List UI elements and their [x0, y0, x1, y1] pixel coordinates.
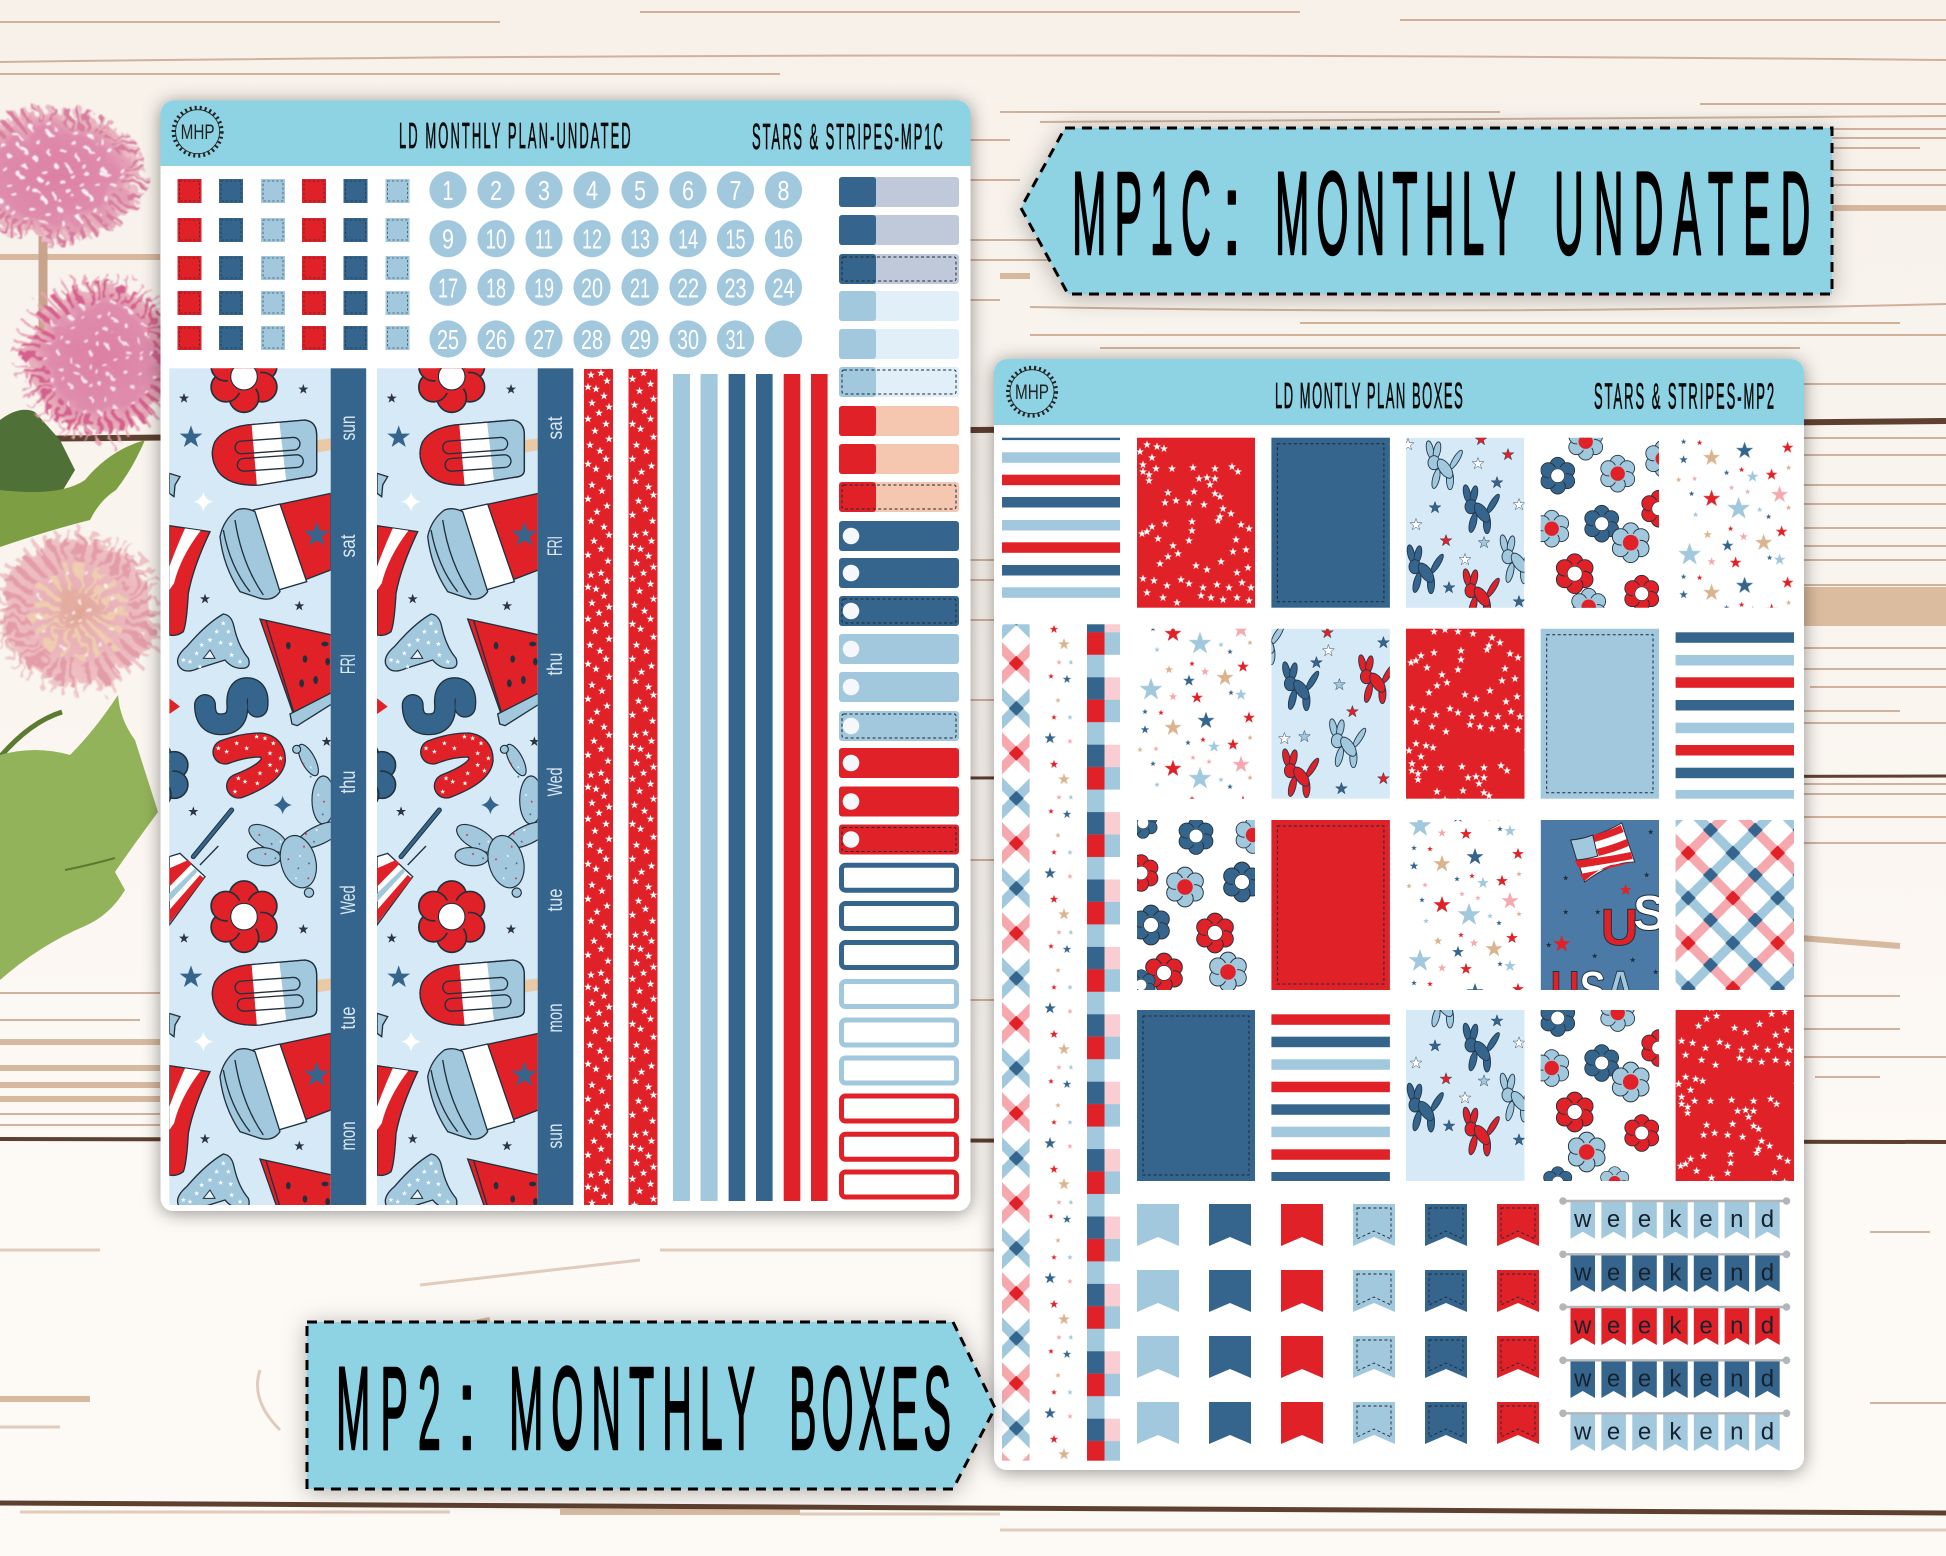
light blue dashed box [1541, 629, 1659, 799]
date number circles 1 to 31: 31 [726, 324, 746, 355]
date number circles 1 to 31: 7 [730, 175, 742, 206]
illustrated washi strip with weekdays, Monday start: thu [544, 652, 567, 676]
stripes box [1271, 1014, 1390, 1181]
icon: MHP wreath logo: MHP [181, 121, 215, 144]
colour block washi strip [1087, 624, 1120, 1461]
date number circles 1 to 31: 22 [677, 272, 699, 303]
red stars box [1406, 629, 1524, 799]
weekend banner stickers: weekend [1573, 1206, 1774, 1233]
red stars box [1676, 1010, 1794, 1181]
navy USA flag box [1540, 820, 1666, 1017]
flowers box [1540, 1010, 1659, 1181]
balloon dog box [1271, 628, 1390, 798]
red dashed box [1271, 820, 1390, 990]
illustrated washi strip with weekdays, Sunday start: thu [337, 770, 360, 794]
callout: MP2 monthly boxes: MP2 [336, 1342, 451, 1474]
date number circles 1 to 31: 20 [581, 272, 603, 303]
red star washi strips [584, 369, 658, 1205]
callout: MP2 monthly boxes: : [457, 1342, 477, 1474]
date number circles 1 to 31: 9 [442, 224, 454, 255]
row 4 full box stickers [1137, 972, 1794, 1197]
icon: upper green leaf [0, 410, 145, 547]
weekend banner stickers: weekend [1573, 1418, 1774, 1446]
panel: MP1C monthly undated sticker sheet [148, 90, 983, 1226]
date number circles 1 to 31: 11 [535, 224, 553, 255]
sheet header band [160, 100, 970, 166]
weekend banner stickers [1560, 1198, 1789, 1451]
date number circles 1 to 31: 26 [485, 324, 507, 355]
solid label stickers with white dots [839, 521, 959, 854]
navy dashed box [1137, 1010, 1255, 1181]
multicolour stars box [1406, 820, 1524, 990]
illustrated washi strip with weekdays, Monday start: mon [544, 1004, 567, 1032]
scattered star washi strip [1045, 624, 1073, 1461]
decorative flowers and leaves [0, 113, 178, 980]
small square stickers [178, 179, 410, 350]
sheet code: STARS & STRIPES-MP2 [1594, 377, 1776, 416]
callout: MP2 monthly boxes [307, 1322, 995, 1489]
balloon dog box [1406, 1010, 1524, 1181]
callout: MP2 monthly boxes: MONTHLY [509, 1342, 763, 1474]
callout: MP2 monthly boxes: BOXES [789, 1342, 956, 1474]
date number circles 1 to 31: 21 [630, 272, 650, 303]
date number circles 1 to 31: 28 [581, 324, 603, 355]
icon: pink flower top [0, 113, 139, 237]
date number circles 1 to 31: 6 [682, 175, 694, 206]
row 2 full box stickers [1137, 615, 1794, 799]
flag tab stickers [1137, 1204, 1539, 1444]
row 1 full box stickers [1002, 423, 1794, 648]
navy USA flag box: U [1601, 899, 1638, 957]
illustrated washi strip with weekdays, Monday start: Wed [544, 768, 567, 796]
sheet header band [994, 359, 1804, 425]
icon: MHP wreath logo: MHP [1015, 381, 1049, 404]
illustrated washi strip with weekdays, Monday start: tue [544, 888, 567, 912]
date number circles 1 to 31: 1 [442, 175, 454, 206]
date number circles 1 to 31 [429, 171, 802, 358]
illustrated washi strip with weekdays, Sunday start: sun [337, 416, 360, 440]
illustrated washi strip with weekdays, Sunday start [169, 368, 366, 1205]
illustrated washi strip with weekdays, Monday start: FRI [544, 536, 567, 556]
icon: lower green leaf [0, 695, 158, 980]
stripes box [1676, 632, 1794, 799]
date number circles 1 to 31: 5 [634, 175, 646, 206]
red stars box [1137, 438, 1255, 608]
date number circles 1 to 31: 30 [677, 324, 699, 355]
date number circles 1 to 31: 2 [490, 175, 502, 206]
stripes box [1002, 438, 1120, 598]
icon: pale pink flower lower [0, 535, 159, 689]
date number circles 1 to 31: 4 [586, 175, 598, 206]
date number circles 1 to 31: 16 [774, 224, 794, 255]
icon: pink flower middle [22, 280, 178, 436]
navy USA flag box: S [1633, 885, 1666, 941]
navy USA flag box: USA [1551, 961, 1635, 1017]
date number circles 1 to 31: 19 [534, 272, 554, 303]
date number circles 1 to 31: 25 [437, 324, 459, 355]
icon: flower stem [38, 236, 48, 330]
date number circles 1 to 31: 29 [629, 324, 651, 355]
date number circles 1 to 31: 27 [533, 324, 555, 355]
weekend banner stickers: weekend [1573, 1260, 1774, 1286]
navy dashed box [1271, 438, 1390, 608]
date number circles 1 to 31: 18 [486, 272, 506, 303]
illustrated washi strip with weekdays, Sunday start: mon [337, 1122, 360, 1150]
icon: MHP wreath logo [174, 108, 222, 156]
sheet title: LD MONTHLY PLAN-UNDATED [399, 116, 633, 156]
callout: MP1C monthly undated [1021, 128, 1832, 294]
outlined label stickers [842, 865, 956, 1197]
sheet title: LD MONTLY PLAN BOXES [1275, 376, 1464, 416]
date number circles 1 to 31: 15 [726, 224, 746, 255]
callout: MP1C monthly undated: MONTHLY [1275, 147, 1523, 279]
callout: MP1C monthly undated: UNDATED [1554, 147, 1820, 279]
date number circles 1 to 31: 14 [678, 224, 698, 255]
illustrated washi strip with weekdays, Monday start [377, 368, 574, 1205]
illustrated washi strip with weekdays, Sunday start: tue [337, 1006, 360, 1030]
balloon dog box [1406, 438, 1524, 608]
two-tone header label stickers [839, 177, 959, 512]
weekend banner stickers: weekend [1573, 1366, 1774, 1392]
illustrated washi strip with weekdays, Monday start: sun [544, 1124, 567, 1148]
flowers box [1137, 820, 1255, 990]
weekend banner stickers: weekend [1573, 1312, 1774, 1340]
flowers box [1540, 438, 1659, 608]
row 3 full box stickers [1124, 808, 1794, 1017]
icon: MHP wreath logo [1008, 368, 1056, 416]
date number circles 1 to 31: 10 [486, 224, 506, 255]
plaid box [1676, 820, 1794, 990]
date number circles 1 to 31: 23 [724, 272, 746, 303]
sheet code: STARS & STRIPES-MP1C [752, 117, 945, 157]
callout: MP1C monthly undated: MP1C [1072, 147, 1219, 279]
date number circles 1 to 31: 24 [772, 272, 794, 303]
multicolour stars box [1676, 438, 1794, 608]
date number circles 1 to 31: 12 [582, 224, 602, 255]
date number circles 1 to 31: 8 [778, 175, 790, 206]
multicolour stars box [1137, 629, 1255, 799]
illustrated washi strip with weekdays, Sunday start: FRI [337, 654, 360, 674]
vertical colour stripes [673, 374, 828, 1201]
date number circles 1 to 31: 3 [538, 175, 550, 206]
callout: MP1C monthly undated: : [1222, 147, 1242, 279]
illustrated washi strip with weekdays, Sunday start: Wed [337, 886, 360, 914]
illustrated washi strip with weekdays, Sunday start: sat [337, 534, 360, 558]
date number circles 1 to 31: 13 [630, 224, 650, 255]
panel: MP2 monthly boxes sticker sheet [994, 359, 1804, 1470]
illustrated washi strip with weekdays, Monday start: sat [544, 416, 567, 440]
date number circles 1 to 31: 17 [438, 272, 458, 303]
plaid washi strip [1002, 624, 1030, 1461]
